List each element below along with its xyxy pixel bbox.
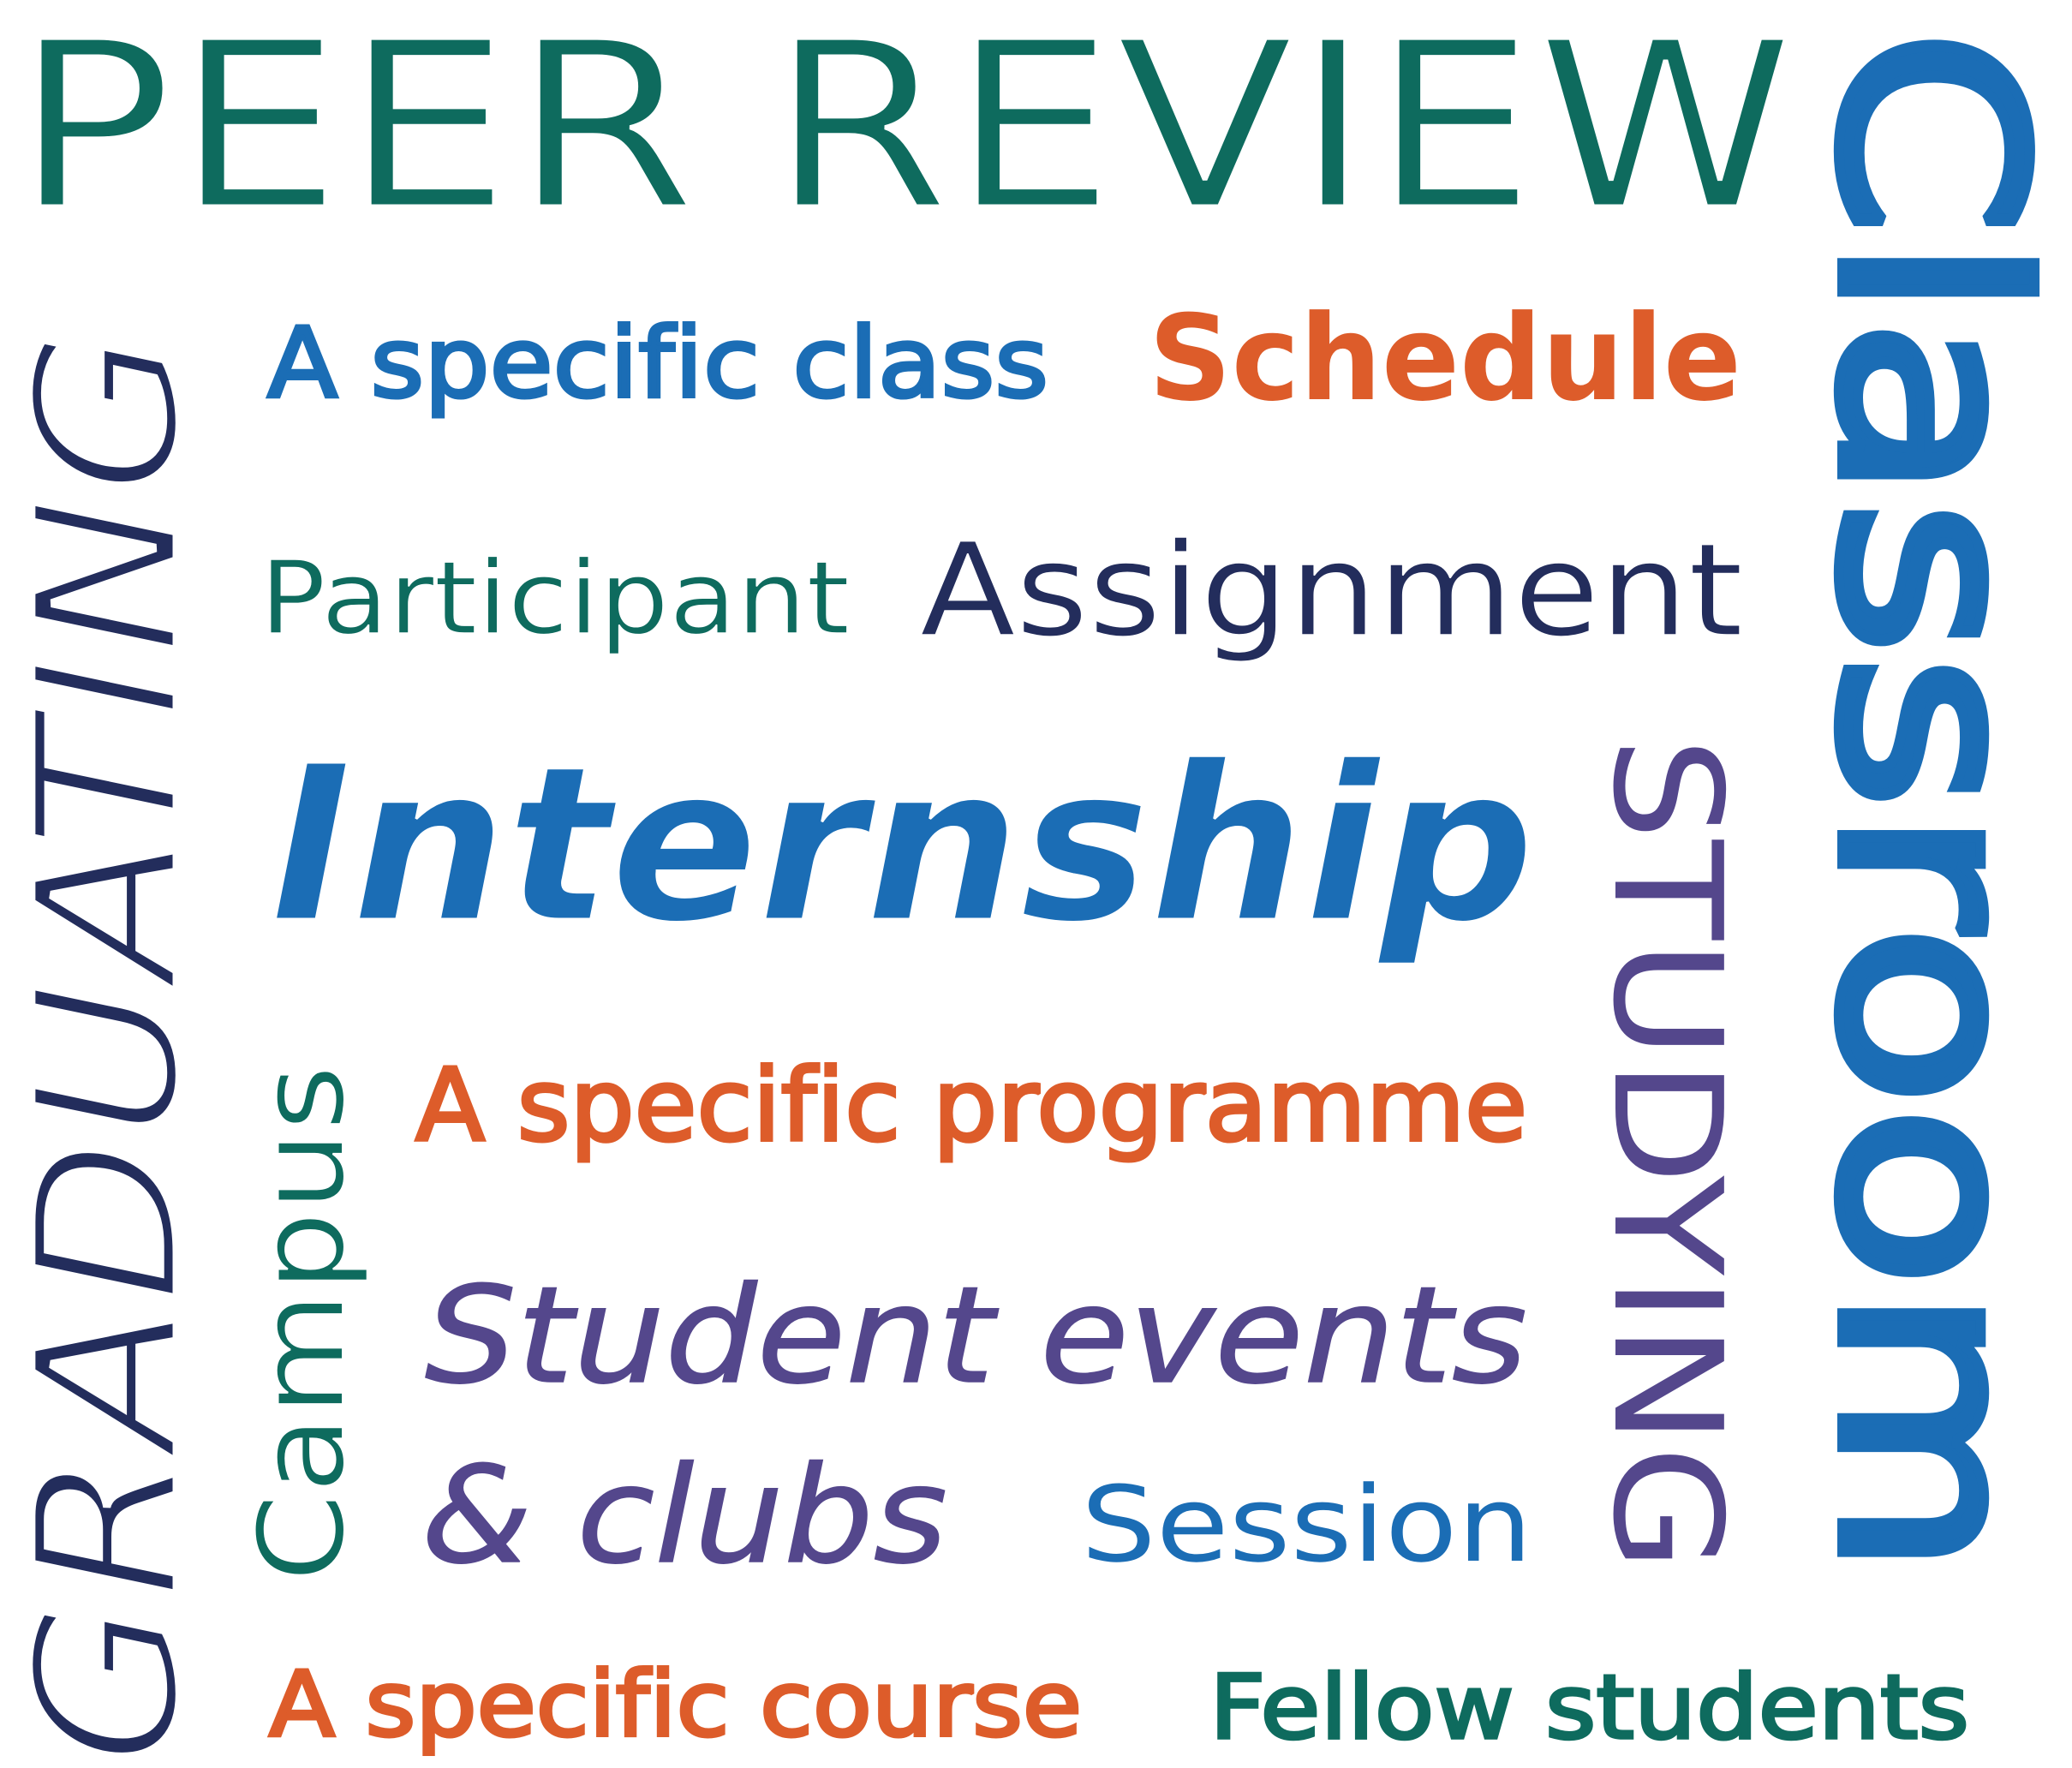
word: Participant: Participant — [260, 539, 850, 657]
word: Student events: Student events — [425, 1257, 1527, 1413]
word: Internship: Internship — [271, 720, 1535, 971]
word: & clubs: & clubs — [421, 1437, 947, 1593]
word: Assignment: Assignment — [920, 517, 1743, 666]
word: Fellow students: Fellow students — [1209, 1657, 1969, 1759]
word: A specific class: A specific class — [267, 307, 1048, 420]
word: A specific course: A specific course — [269, 1652, 1082, 1757]
word: STUDYING (vertical): STUDYING — [1579, 737, 1753, 1572]
word: Classroom (vertical): Classroom — [1782, 29, 2072, 1576]
word: A specific programme: A specific programme — [415, 1047, 1527, 1164]
word: Session: Session — [1081, 1464, 1532, 1586]
word: Campus (vertical): Campus — [233, 1065, 371, 1582]
word: Schedule: Schedule — [1149, 290, 1741, 427]
